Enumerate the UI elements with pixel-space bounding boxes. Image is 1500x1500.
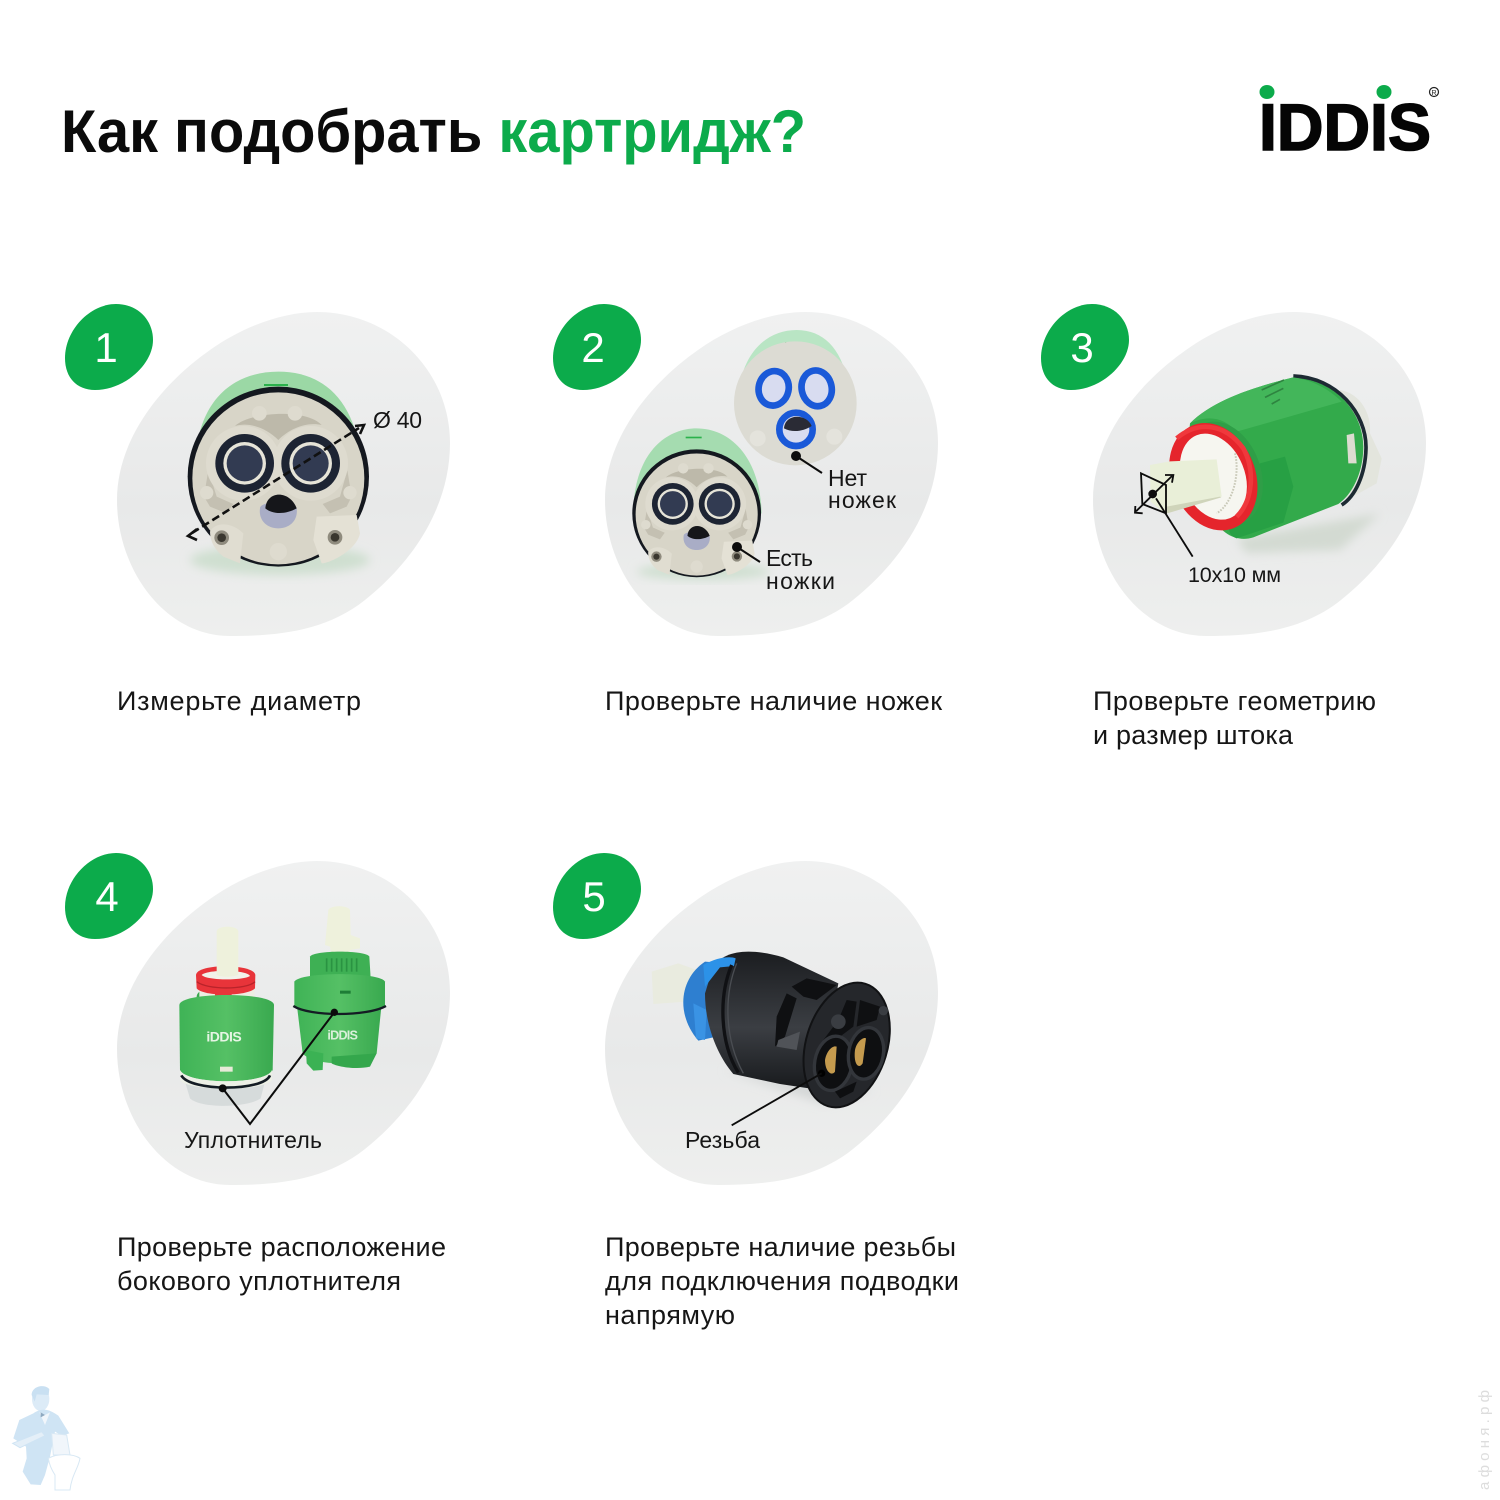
cartridge photo: right, seal high <box>293 906 386 1071</box>
photo background blob <box>117 312 450 636</box>
caption: step 3 <box>1093 686 1376 750</box>
caption: step 4 <box>117 1232 446 1296</box>
number badge 3: 3 <box>1070 324 1094 371</box>
label: has legs: ножки <box>766 568 835 594</box>
cartridge photo: no legs <box>734 330 857 465</box>
label: thread: Резьба <box>685 1127 760 1153</box>
number badge 5: 5 <box>582 873 606 920</box>
logo: IDDIS: IDDIS <box>1259 90 1431 164</box>
number badge 4: 4 <box>95 873 119 920</box>
photo background blob <box>605 861 938 1185</box>
number badge 2 <box>553 304 641 390</box>
caption: step 4: бокового уплотнителя <box>117 1266 401 1296</box>
caption: step 5: Проверьте наличие резьбы <box>605 1232 956 1262</box>
caption: step 1: Измерьте диаметр <box>117 686 361 716</box>
number badge 5 <box>553 853 641 939</box>
cartridge photo: side view <box>1150 376 1382 553</box>
stem size icon <box>1135 473 1193 557</box>
photo background blob <box>605 312 938 636</box>
caption: step 3: и размер штока <box>1093 720 1294 750</box>
panel: step 4 seal <box>65 853 450 1185</box>
dashed diameter arrow <box>188 425 364 540</box>
number badge 2: 2 <box>581 324 605 371</box>
cartridge photo: right, seal high: iDDIS <box>327 1028 358 1042</box>
number badge 4 <box>65 853 153 939</box>
panel: step 3 stem <box>1041 304 1426 636</box>
logo: IDDIS: R <box>1431 90 1437 97</box>
label: has legs <box>766 545 835 594</box>
label: no legs <box>828 465 897 513</box>
panel: step 5 thread <box>553 853 938 1185</box>
cartridge photo: front face <box>188 372 370 575</box>
pointer: has legs <box>732 542 760 562</box>
label: seal: Уплотнитель <box>184 1127 322 1153</box>
label: has legs: Есть <box>766 545 813 571</box>
number badge 1 <box>65 304 153 390</box>
photo background blob <box>117 861 450 1185</box>
caption: step 5: для подключения подводки <box>605 1266 959 1296</box>
photo background blob <box>1093 312 1426 636</box>
caption: step 3: Проверьте геометрию <box>1093 686 1376 716</box>
label: stem size: 10x10 мм <box>1188 563 1281 587</box>
title: Как подобрать картридж? <box>61 98 806 165</box>
number badge 3 <box>1041 304 1129 390</box>
pointer: thread <box>732 1070 825 1125</box>
caption: step 5: напрямую <box>605 1300 735 1330</box>
number badge 1: 1 <box>94 324 118 371</box>
text: vertical watermark: афоня.рф <box>1476 1390 1493 1490</box>
cartridge photo: with legs <box>632 428 770 580</box>
caption: step 5 <box>605 1232 959 1330</box>
panel: step 1 diameter <box>65 304 450 636</box>
pointer: no legs <box>791 451 822 473</box>
caption: step 2: Проверьте наличие ножек <box>605 686 942 716</box>
cartridge photo: left, seal low: iDDIS <box>206 1029 242 1045</box>
label: no legs: Нет <box>828 465 867 491</box>
pointers: seal <box>219 1009 338 1124</box>
label: no legs: ножек <box>828 487 897 513</box>
panel: step 2 legs <box>553 304 938 636</box>
caption: step 4: Проверьте расположение <box>117 1232 446 1262</box>
cartridge photo: black with thread <box>652 952 904 1118</box>
label: diameter: Ø 40 <box>373 407 422 433</box>
cartridge photo: left, seal low <box>179 927 274 1106</box>
icon: plumber watermark <box>13 1386 80 1490</box>
